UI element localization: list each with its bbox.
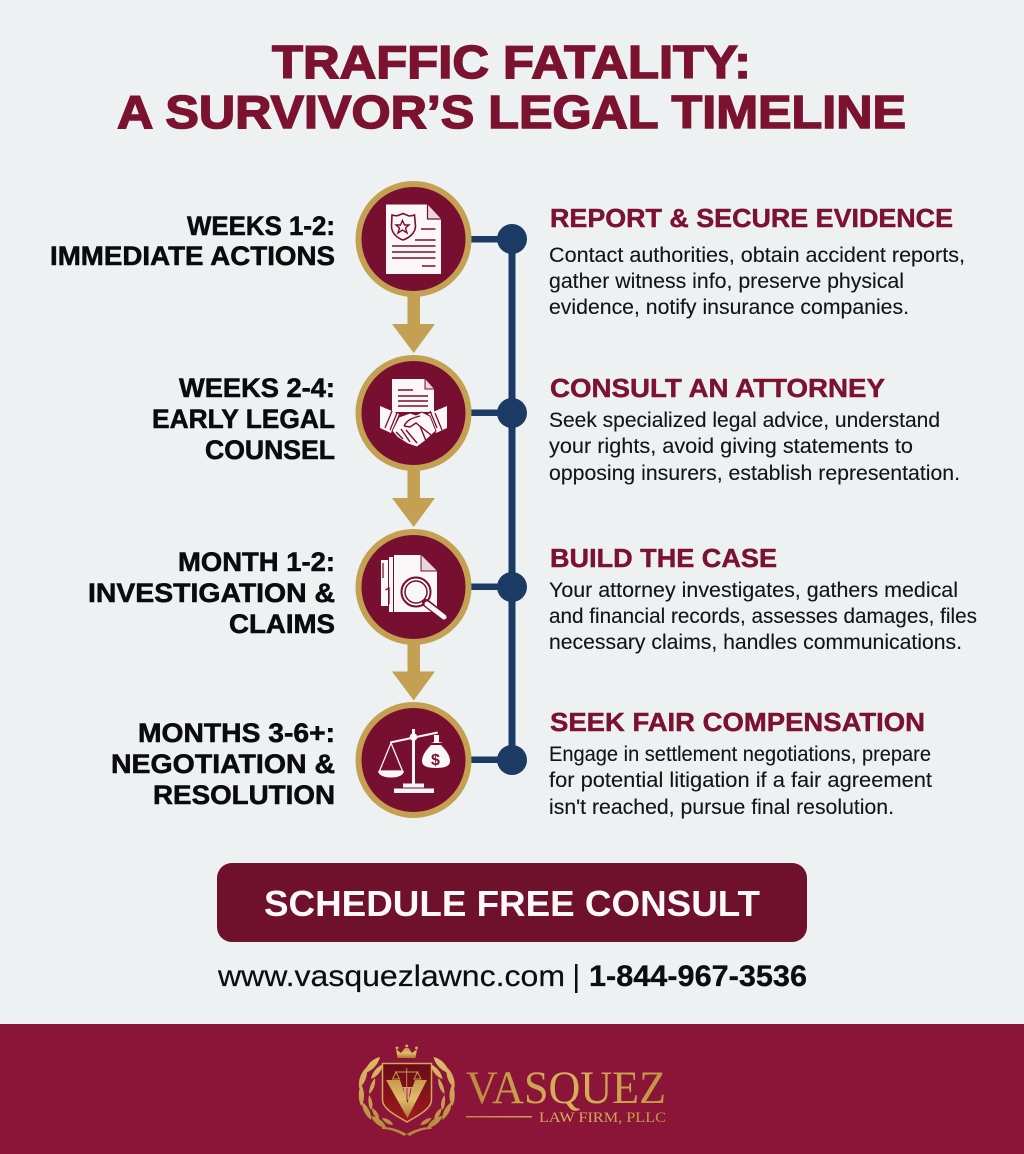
contact line [217, 960, 807, 993]
step 3 description: BUILD THE CASE [550, 545, 777, 573]
call to action button [217, 863, 807, 942]
step 2 description: your rights, avoid giving statements to [549, 435, 913, 458]
step 3 medallion with magnifier icon [358, 532, 468, 642]
step 4 label: RESOLUTION [153, 780, 335, 810]
step 2 description: opposing insurers, establish representation. [549, 462, 960, 485]
step 1 label: IMMEDIATE ACTIONS [50, 241, 335, 271]
step 1 label [50, 211, 335, 271]
logo shield [382, 1064, 432, 1122]
contact line: 1-844-967-3536 [589, 960, 807, 993]
step 1 description: gather witness info, preserve physical [549, 270, 904, 293]
arrow: step 3 to step 4 [392, 643, 435, 700]
logo right wreath [406, 1057, 455, 1136]
step 3 description: necessary claims, handles communications. [549, 631, 962, 654]
step 2 description [549, 375, 960, 485]
step 4 label: MONTHS 3-6+: [138, 718, 335, 748]
step 1 medallion with police report icon [358, 184, 468, 294]
step 4 description: SEEK FAIR COMPENSATION [550, 709, 925, 737]
step 4 description: isn't reached, pursue final resolution. [549, 796, 894, 819]
footer band [0, 1024, 1024, 1154]
step 4 description [549, 709, 932, 819]
step 1 description: evidence, notify insurance companies. [549, 296, 909, 319]
step 4 description: for potential litigation if a fair agreement [549, 769, 932, 792]
icon: case file and magnifying glass [381, 555, 444, 617]
step 1 description: Contact authorities, obtain accident reports, [549, 244, 965, 267]
step 3 description: and financial records, assesses damages, files [549, 605, 977, 628]
step 3 label: CLAIMS [229, 609, 335, 639]
step 4 label: NEGOTIATION & [111, 749, 335, 779]
logo wordmark: LAW FIRM, PLLC [539, 1110, 666, 1126]
step 2 medallion with handshake icon [358, 358, 468, 468]
arrow: step 1 to step 2 [392, 296, 435, 353]
logo: Vasquez Law Firm [359, 1044, 666, 1136]
step 2 label: EARLY LEGAL [152, 404, 335, 434]
step 3 label [88, 547, 335, 639]
logo wordmark: VASQUEZ [466, 1062, 666, 1114]
logo left wreath [359, 1057, 407, 1136]
step 2 label: WEEKS 2-4: [179, 373, 335, 403]
step 3 description [549, 545, 977, 654]
title: TRAFFIC FATALITY: [272, 36, 751, 88]
title [117, 36, 906, 138]
step 4 description: Engage in settlement negotiations, prepare [549, 743, 931, 766]
step 2 label [152, 373, 335, 465]
step 2 description: Seek specialized legal advice, understand [549, 409, 940, 432]
step 1 label: WEEKS 1-2: [187, 211, 335, 241]
step 3 label: MONTH 1-2: [178, 547, 335, 577]
step 3 description: Your attorney investigates, gathers medical [549, 579, 958, 602]
icon: scales and money bag: $ [431, 752, 440, 769]
arrow: step 2 to step 3 [392, 470, 435, 527]
title: A SURVIVOR’S LEGAL TIMELINE [117, 86, 906, 138]
timeline connector: navy vertical line with nodes [470, 224, 527, 775]
contact line: www.vasquezlawnc.com [217, 960, 565, 993]
step 2 label: COUNSEL [205, 435, 335, 465]
logo crown [396, 1044, 418, 1058]
step 4 label [111, 718, 335, 810]
icon: handshake over document [380, 379, 447, 447]
call to action button: SCHEDULE FREE CONSULT [264, 883, 760, 924]
step 4 medallion with scales icon [358, 705, 468, 815]
step 1 description [549, 205, 965, 319]
step 1 description: REPORT & SECURE EVIDENCE [550, 205, 953, 233]
icon: police report document [386, 204, 441, 274]
step 3 label: INVESTIGATION & [88, 578, 335, 608]
step 2 description: CONSULT AN ATTORNEY [550, 375, 885, 403]
